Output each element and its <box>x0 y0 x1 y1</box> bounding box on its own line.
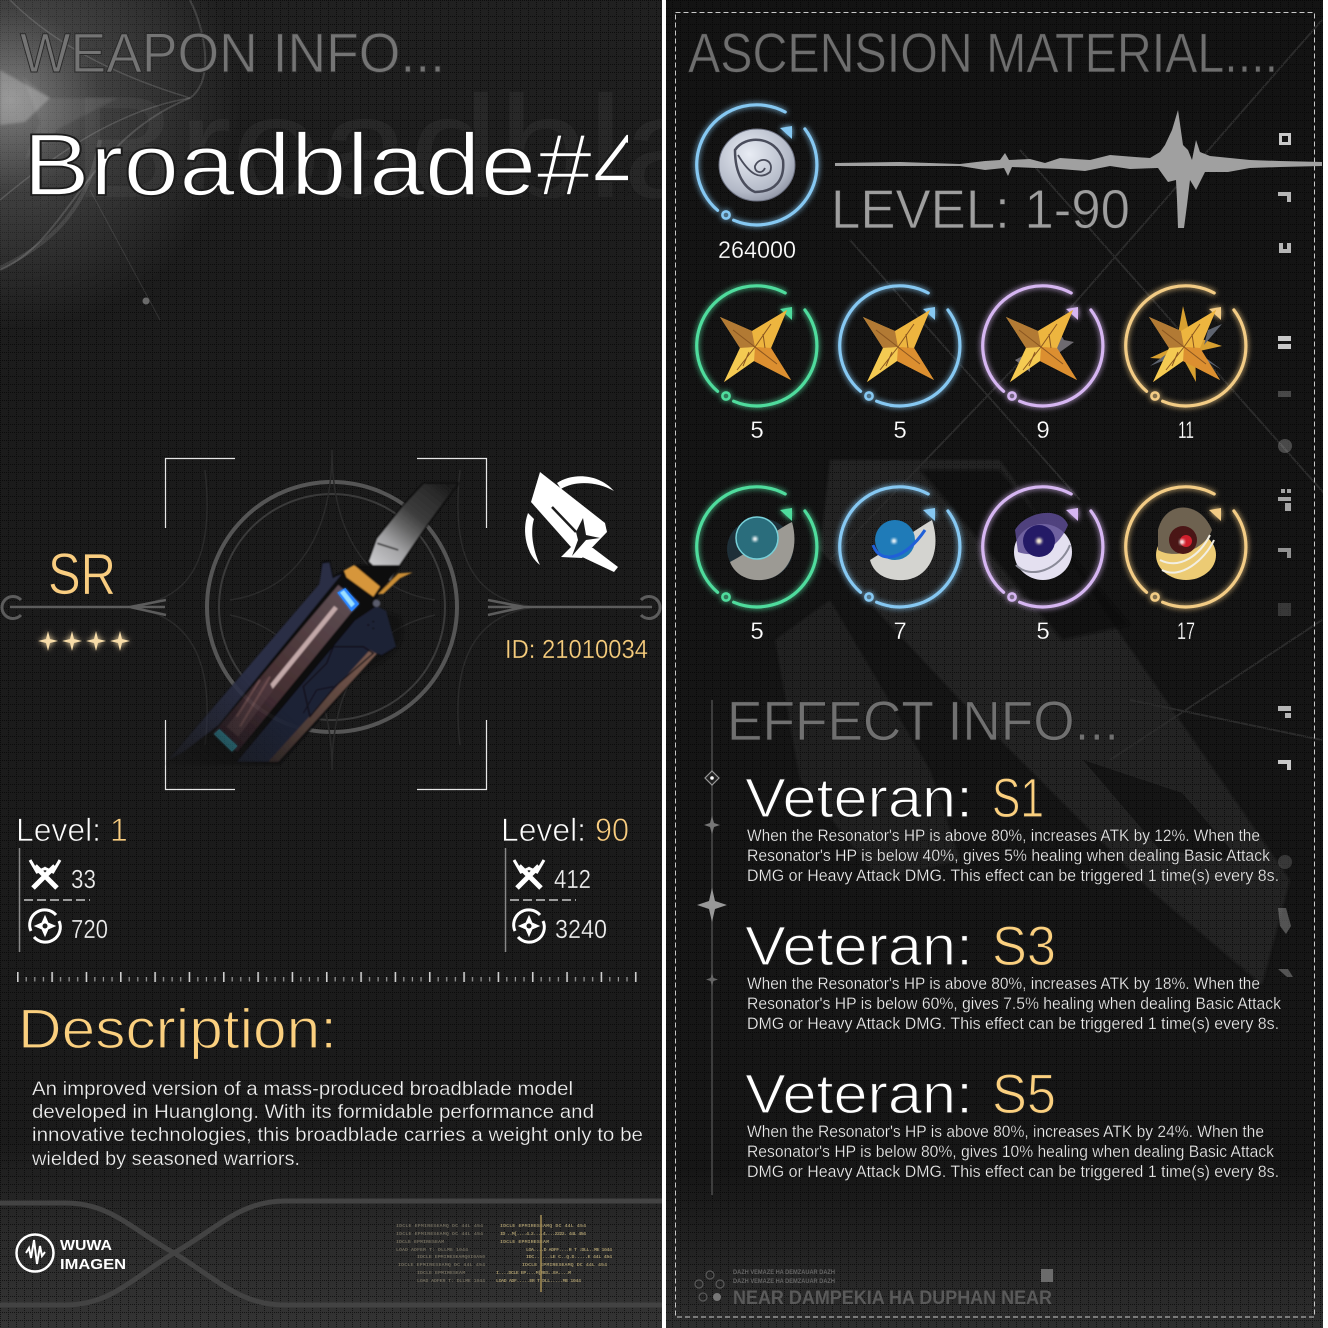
ring <box>697 487 817 607</box>
material: purple star <box>983 286 1103 444</box>
section heading: effect info: EFFECT INFO... <box>727 689 1119 752</box>
effect text: When the Resonator's HP is above 80%, increases ATK by 18%. When the <box>747 974 1260 993</box>
orb icon <box>870 520 936 580</box>
rank label: S3 <box>992 914 1056 977</box>
footer code block: LOAD ADFER T: DLLME 1044 <box>396 1247 468 1253</box>
description body <box>31 1079 643 1170</box>
material: credits <box>697 105 817 264</box>
effect: S5 <box>745 1062 1279 1181</box>
stat rail <box>18 848 20 952</box>
ring <box>983 286 1103 406</box>
spikes <box>1150 306 1222 382</box>
level range: LEVEL: 1-90 <box>831 178 1130 240</box>
effect text: When the Resonator's HP is above 80%, increases ATK by 24%. When the <box>747 1122 1264 1141</box>
description heading: Description: <box>18 997 337 1060</box>
effect: S3 <box>745 914 1281 1033</box>
effect text <box>747 1122 1279 1181</box>
description body: wielded by seasoned warriors. <box>31 1149 300 1170</box>
effect text <box>747 826 1279 885</box>
orb icon <box>1014 513 1072 580</box>
level 1 value: 1 <box>110 812 128 848</box>
top-left flower ornament <box>0 0 207 320</box>
large script line: NEAR DAMPEKIA HA DUPHAN NEAR <box>733 1288 1052 1309</box>
ruler <box>17 972 637 982</box>
footer code block: IDCLE EPMIRESEAM <box>396 1239 444 1245</box>
emblem behind weapon <box>130 450 535 770</box>
footer code block: IDCLE EPMIRESEAMQ DC 44L 454 <box>500 1223 586 1229</box>
count: 9 <box>1036 417 1050 444</box>
material: gold orb <box>1126 487 1246 645</box>
footer code block: I....DCLE EP....M[RES..EA....M <box>496 1270 571 1276</box>
logo <box>16 1234 126 1273</box>
stats: level 1 <box>16 812 128 952</box>
rank label: S5 <box>992 1062 1056 1125</box>
orb icon <box>1156 508 1216 580</box>
effect: S1 <box>745 766 1279 885</box>
frame brackets around weapon <box>166 458 486 790</box>
star icon <box>720 310 791 382</box>
footer dots <box>695 1271 724 1301</box>
icon: weapon type broadblade <box>525 472 618 572</box>
attack value: 412 <box>554 864 591 894</box>
hp value: 720 <box>71 914 108 944</box>
count: 5 <box>750 618 764 645</box>
star icon <box>1006 310 1077 382</box>
footer code block: IDC......LE C..Q.D.....E 44L 454 <box>526 1254 612 1260</box>
effect text <box>747 974 1281 1033</box>
material: purple orb <box>983 487 1103 645</box>
stat rail <box>504 848 506 952</box>
effect text: DMG or Heavy Attack DMG. This effect can be triggered 1 time(s) every 8s. <box>747 1014 1279 1033</box>
rank label: S1 <box>992 766 1044 829</box>
count: 11 <box>1178 417 1194 444</box>
dashed frame <box>676 12 1314 1317</box>
footer code block: IDCLE EPMIRESEAM <box>417 1270 465 1276</box>
background emblem <box>775 20 1328 985</box>
material: blue star <box>840 286 960 444</box>
star icon <box>1149 310 1220 382</box>
effect text: Resonator's HP is below 40%, gives 5% healing when dealing Basic Attack <box>747 846 1270 865</box>
weapon illustration <box>163 483 458 765</box>
ring <box>697 286 817 406</box>
orb icon <box>727 517 794 580</box>
waveform <box>835 110 1322 228</box>
right panel background <box>666 0 1323 1328</box>
effect text: Resonator's HP is below 60%, gives 7.5% healing when dealing Basic Attack <box>747 994 1281 1013</box>
effect text: DMG or Heavy Attack DMG. This effect can be triggered 1 time(s) every 8s. <box>747 1162 1279 1181</box>
small script lines: DAZH VEMAZE HA DEMZAUAR DAZH <box>733 1270 835 1276</box>
material row: tuners <box>697 286 1246 444</box>
footer alien script block <box>695 1269 1053 1309</box>
level 90 label: Level: <box>501 812 586 848</box>
grid texture <box>666 0 1323 1328</box>
left panel background <box>0 0 662 1328</box>
icon: attack <box>30 860 60 888</box>
footer code block: LOAD ADFER T: DLLME 1044 <box>417 1278 485 1284</box>
ring <box>697 105 817 225</box>
count: 5 <box>1036 618 1050 645</box>
attack value: 33 <box>71 864 96 894</box>
section heading: weapon info: WEAPON INFO... <box>20 21 445 84</box>
effect text: When the Resonator's HP is above 80%, increases ATK by 12%. When the <box>747 826 1260 845</box>
logo mark <box>16 1234 54 1272</box>
square marker <box>1041 1269 1053 1282</box>
rarity stars <box>38 631 130 651</box>
weapon id: ID: 21010034 <box>505 634 648 664</box>
spikes <box>1015 330 1074 372</box>
panel: weapon info <box>0 0 712 1328</box>
grid texture <box>0 0 662 1328</box>
weapon name: Broadblade#4 <box>23 115 648 214</box>
material: gold star <box>1126 286 1246 444</box>
coin icon <box>719 129 795 201</box>
footer code block: IDCLE EPMIRESEAMQ0I0A50 <box>417 1254 485 1260</box>
footer code block: IDCLE EPMIRESEAMQ DC 44L 454 <box>396 1231 483 1237</box>
ring <box>840 487 960 607</box>
effect text: DMG or Heavy Attack DMG. This effect can be triggered 1 time(s) every 8s. <box>747 866 1279 885</box>
level 90 value: 90 <box>595 812 629 848</box>
left rail ornament <box>2 596 166 618</box>
star icon <box>863 310 934 382</box>
stats: level 90 <box>501 812 629 952</box>
effect text: Resonator's HP is below 80%, gives 10% healing when dealing Basic Attack <box>747 1142 1274 1161</box>
right rail ornament <box>488 596 660 618</box>
material row: orbs <box>697 487 1246 645</box>
footer code block: IDCLE EPMIRESEAMQ DC 44L 454 <box>522 1262 607 1268</box>
small script line two: DAZH VEMAZE HA DEMZAUAR DAZH <box>733 1279 835 1285</box>
description body: An improved version of a mass-produced broadblade model <box>32 1079 573 1100</box>
icon: hp <box>514 910 544 942</box>
ring <box>983 487 1103 607</box>
count: 7 <box>893 618 907 645</box>
side glyph column <box>1278 133 1293 977</box>
description body: developed in Huanglong. With its formidable performance and <box>32 1102 594 1123</box>
count: 17 <box>1177 618 1195 645</box>
description body: innovative technologies, this broadblade carries a weight only to be <box>32 1125 643 1146</box>
footer code block: LOAD ADF.....ER T:DLL.....ME 1044 <box>496 1278 581 1284</box>
rank heading: Veteran: <box>745 1062 973 1125</box>
decorative dot <box>142 298 150 304</box>
faint watermark name: Broadbla <box>72 66 712 228</box>
stat divider <box>510 899 576 901</box>
material: green star <box>697 286 817 444</box>
ring <box>1126 487 1246 607</box>
icon: hp <box>30 910 60 942</box>
hp value: 3240 <box>555 914 607 944</box>
ring <box>1126 286 1246 406</box>
rank heading: Veteran: <box>745 914 973 977</box>
count: 5 <box>893 417 907 444</box>
footer code block: IDCLE EPMIRESEAM <box>500 1239 549 1245</box>
footer code block: ID ..M[....4.2....4....2222. 44L 454 <box>500 1231 586 1237</box>
footer code block: IDCLE EPMIRESEAMQ DC 44L 454 <box>398 1262 485 1268</box>
footer code block: IDCLE EPMIRESEAMQ DC 44L 454 <box>396 1223 483 1229</box>
credits amount: 264000 <box>718 237 796 264</box>
footer ribbon <box>0 1201 662 1305</box>
logo wordmark: WUWA <box>60 1237 112 1254</box>
logo wordmark line two: IMAGEN <box>60 1256 126 1273</box>
count: 5 <box>750 417 764 444</box>
icon: attack <box>514 860 544 888</box>
panel: ascension and effects <box>666 0 1328 1328</box>
effect timeline <box>697 700 727 1195</box>
footer code block: LOA....D ADFF....R T :DLL..ME 1044 <box>526 1247 612 1253</box>
footer code block <box>396 1223 612 1284</box>
rank heading: Veteran: <box>745 766 973 829</box>
rarity label: SR <box>48 542 116 607</box>
material: blue orb <box>840 487 960 645</box>
material: green orb <box>697 487 817 645</box>
footer gold marker line <box>540 1215 542 1292</box>
ring <box>840 286 960 406</box>
level 1 label: Level: <box>16 812 101 848</box>
stat divider <box>24 899 90 901</box>
